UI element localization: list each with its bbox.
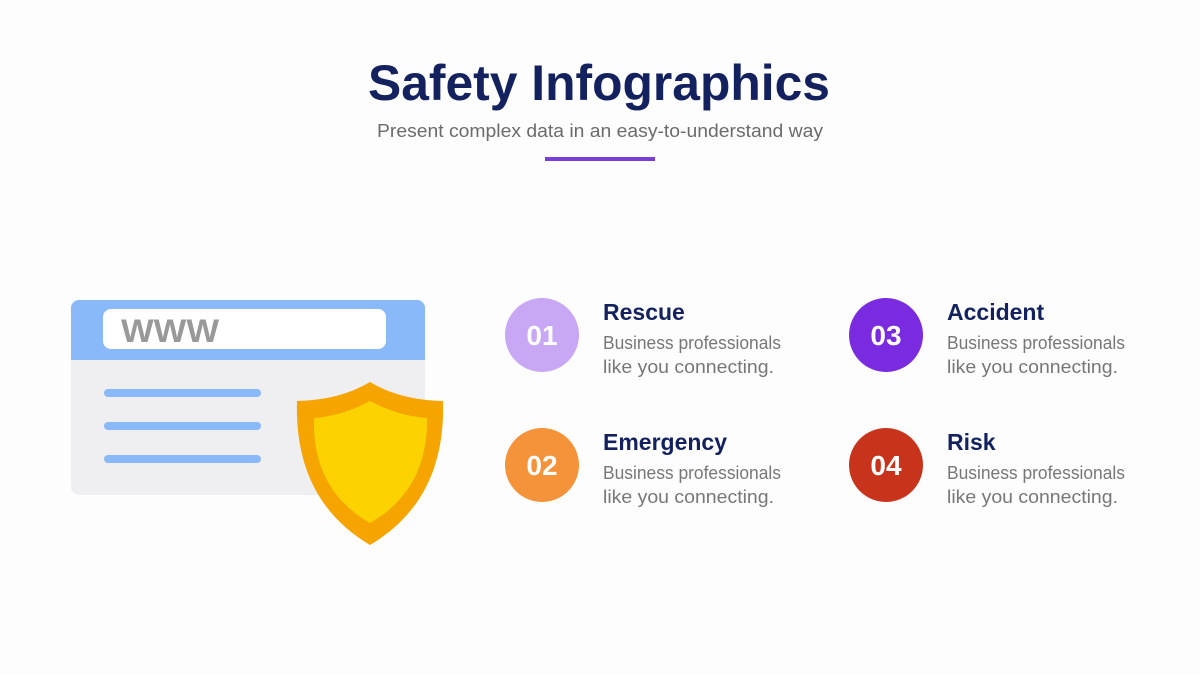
item 02: Emergency: like you connecting. xyxy=(603,487,774,507)
item 01: Rescue xyxy=(505,298,781,377)
browser window: WWW xyxy=(121,313,220,349)
item 01: Rescue: Rescue xyxy=(603,299,685,325)
item 02: Emergency xyxy=(505,428,781,507)
subtitle: Present complex data in an easy-to-understand way xyxy=(377,121,823,141)
item 04: Risk: 04 xyxy=(870,450,902,481)
item 04: Risk xyxy=(849,428,1125,507)
item 04: Risk: Risk xyxy=(947,429,996,455)
item 01: Rescue: Business professionals xyxy=(603,333,781,353)
browser window xyxy=(71,300,425,495)
item 02: Emergency: 02 xyxy=(526,450,558,481)
item 04: Risk: Business professionals xyxy=(947,463,1125,483)
title: Safety Infographics xyxy=(368,55,830,111)
item 03: Accident: like you connecting. xyxy=(947,357,1118,377)
item 03: Accident: Business professionals xyxy=(947,333,1125,353)
item 03: Accident: Accident xyxy=(947,299,1044,325)
item 03: Accident: 03 xyxy=(870,320,902,351)
item 02: Emergency: Emergency xyxy=(603,429,727,455)
icon: shield xyxy=(297,382,443,545)
title underline xyxy=(545,157,655,161)
item 01: Rescue: like you connecting. xyxy=(603,357,774,377)
item 03: Accident xyxy=(849,298,1125,377)
icon: browser window with shield xyxy=(71,300,443,545)
item 01: Rescue: 01 xyxy=(526,320,558,351)
item 02: Emergency: Business professionals xyxy=(603,463,781,483)
item 04: Risk: like you connecting. xyxy=(947,487,1118,507)
